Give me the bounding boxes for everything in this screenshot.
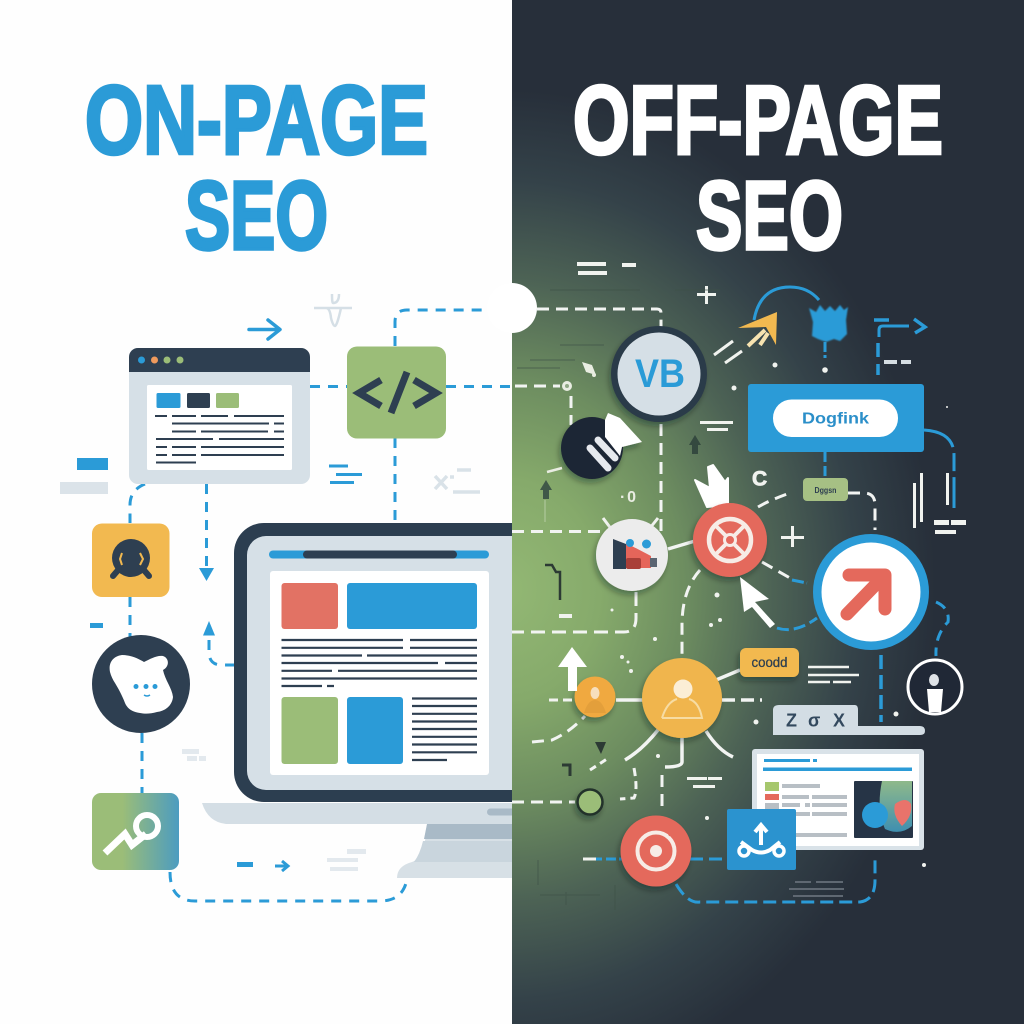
icon: small green ring	[578, 790, 602, 814]
icon: arrow circle	[813, 534, 929, 650]
bottom dash and arrow	[237, 861, 288, 871]
arrow: down dashed head	[199, 568, 214, 581]
icon: person in ring	[908, 660, 962, 714]
icon: yellow person large	[642, 658, 722, 738]
title: on-page seo: SEO	[185, 161, 328, 270]
laptop frame	[234, 523, 512, 802]
arrow: white up	[558, 647, 587, 691]
icon: white cursor	[740, 577, 775, 628]
browser dots	[138, 356, 184, 364]
icon: hand above red wheel	[695, 465, 728, 507]
text lines beside yellow label	[808, 667, 859, 682]
browser page	[147, 385, 292, 470]
icon: key tile	[92, 793, 179, 870]
dark tick	[562, 765, 570, 776]
base pill	[487, 808, 512, 816]
white stub by target	[583, 858, 596, 860]
blue block	[347, 697, 403, 764]
panel: off-page background	[512, 0, 1024, 1024]
panel: folder tab: Z	[786, 710, 797, 730]
laptop base	[202, 803, 512, 824]
faint footer text lines	[789, 881, 844, 897]
title: on-page seo	[85, 66, 428, 270]
panel: folder tab: X	[833, 710, 845, 730]
green block	[282, 697, 338, 764]
panel: folder tab: σ	[808, 710, 820, 730]
half circle notch	[487, 283, 537, 333]
diagonal dashes under cursor	[714, 341, 742, 363]
panel: dogfink button card: Dogfink	[802, 410, 869, 428]
address bar	[269, 550, 489, 558]
dark small up arrows	[540, 435, 701, 522]
label: coodd	[740, 648, 799, 677]
small dash	[90, 623, 103, 628]
page sheet	[270, 571, 489, 775]
browser buttons	[156, 393, 239, 408]
blue banner	[347, 583, 477, 629]
arrow: up dashed head	[203, 621, 215, 636]
icon: yellow search tile	[92, 524, 170, 597]
panel: dogfink button card	[748, 384, 924, 452]
icon: code tile	[347, 346, 446, 438]
green label: Dggsn	[814, 486, 837, 495]
laptop screen	[247, 536, 512, 790]
faint math marks	[435, 470, 480, 492]
faint glyph	[314, 294, 352, 326]
dark corner mark	[545, 565, 560, 600]
on-page connectors	[130, 310, 512, 901]
connector stub	[549, 698, 574, 702]
icon: blue network tile	[727, 809, 796, 870]
panel: browser window	[129, 348, 310, 484]
icon: play circle	[596, 518, 668, 591]
icon: blue splash	[809, 305, 848, 373]
panel: analytics window	[752, 749, 924, 850]
title: off-page seo	[573, 66, 943, 270]
side bars	[60, 458, 108, 494]
browser text lines	[155, 416, 284, 462]
icon: dark megaphone badge	[561, 413, 642, 479]
label: coodd: coodd	[752, 654, 788, 670]
faint text marks	[182, 749, 366, 871]
row items	[765, 782, 847, 837]
browser title bar	[129, 348, 310, 372]
panel: folder tab	[773, 705, 925, 735]
icon: red target	[620, 816, 692, 886]
panel: on-page background	[0, 0, 512, 1024]
chart thumbnail	[854, 781, 913, 838]
green label	[803, 478, 848, 501]
title: off-page seo: SEO	[696, 161, 843, 270]
red block	[282, 583, 338, 629]
faint dark marks	[517, 290, 720, 910]
icon: cursor dart	[738, 312, 777, 346]
icon: VB circle	[611, 326, 707, 422]
arrow: dark down	[595, 742, 606, 754]
title: on-page seo: ON-PAGE	[85, 66, 428, 174]
arrow: top right pointing	[249, 320, 280, 339]
icon: VB circle: VB	[635, 352, 685, 396]
header lines	[763, 759, 912, 771]
side text lines	[412, 698, 477, 760]
icon: dark circle with white blob	[92, 635, 190, 733]
small marks near badge: ·0	[620, 489, 636, 506]
icon: red wheel	[693, 503, 767, 577]
panel: laptop	[202, 523, 512, 878]
small marks near badge	[547, 362, 636, 506]
laptop stand	[397, 824, 512, 878]
off-page connectors white	[512, 309, 875, 808]
small blue lines	[329, 466, 362, 482]
icon: yellow person small	[574, 676, 616, 718]
gray ticks	[884, 360, 911, 364]
white solid connectors	[590, 541, 762, 799]
label: C letter: C	[752, 468, 767, 490]
small white marks	[559, 262, 966, 867]
article text lines	[282, 640, 477, 686]
off-page connectors blue	[592, 287, 954, 902]
